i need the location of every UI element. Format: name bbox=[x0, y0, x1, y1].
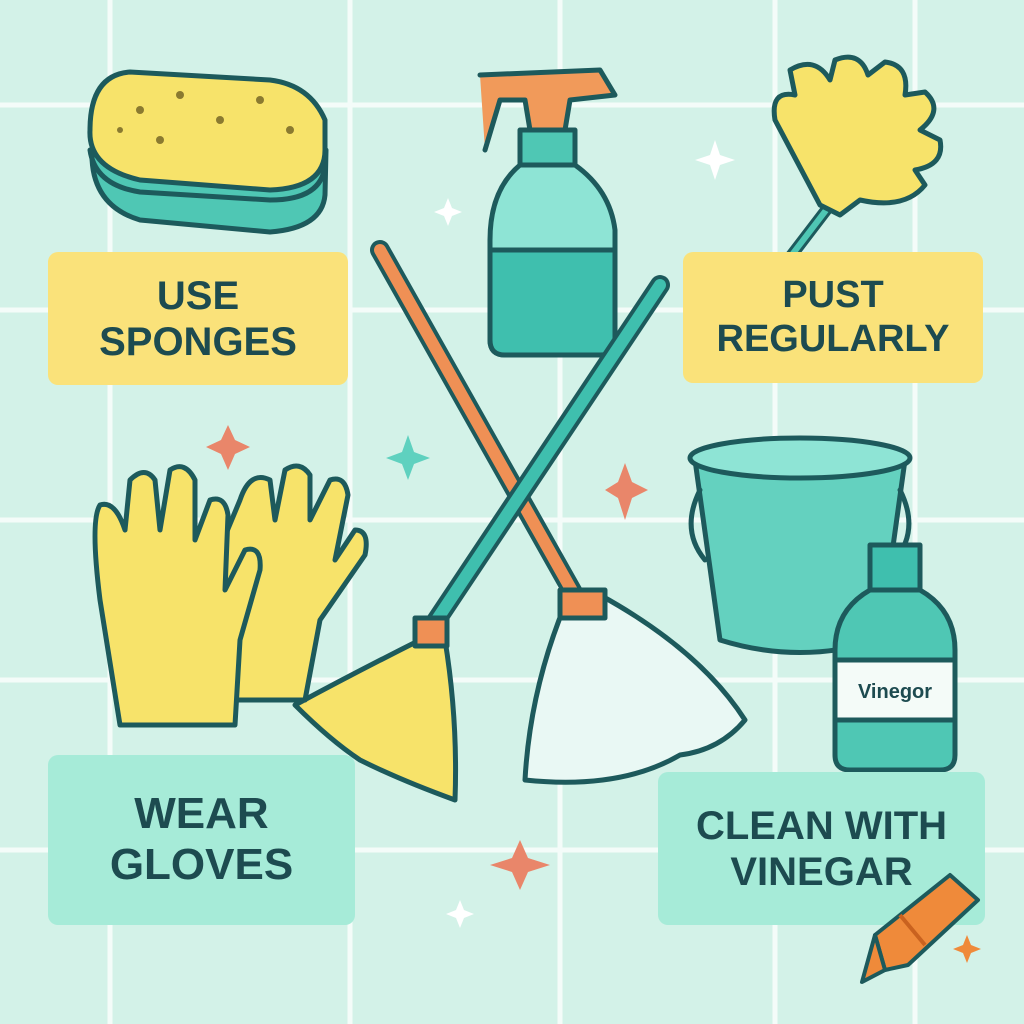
label: use sponges: USE bbox=[157, 274, 239, 318]
label: wear gloves: WEAR bbox=[134, 789, 269, 838]
label: wear gloves: GLOVES bbox=[110, 840, 293, 889]
label: dust regularly bbox=[683, 252, 983, 383]
label: use sponges bbox=[48, 252, 348, 385]
sparkles bbox=[206, 140, 981, 963]
icon: vinegar bottle bbox=[835, 545, 955, 770]
label: clean with vinegar: CLEAN WITH bbox=[696, 804, 947, 848]
label: clean with vinegar: VINEGAR bbox=[730, 850, 913, 894]
icon: spray bottle bbox=[480, 70, 615, 355]
icon: bucket bbox=[690, 438, 910, 652]
icon: vinegar bottle: Vinegor bbox=[858, 681, 932, 703]
icon: sponge bbox=[90, 72, 326, 232]
label: dust regularly: PUST bbox=[782, 274, 884, 316]
icon: duster bbox=[765, 57, 941, 290]
label: dust regularly: REGULARLY bbox=[717, 318, 949, 360]
label: clean with vinegar bbox=[658, 772, 985, 925]
label: wear gloves bbox=[48, 755, 355, 925]
icon: gloves bbox=[95, 466, 366, 725]
icon: broom stick and mop stick bbox=[295, 250, 745, 800]
label: use sponges: SPONGES bbox=[99, 320, 297, 364]
